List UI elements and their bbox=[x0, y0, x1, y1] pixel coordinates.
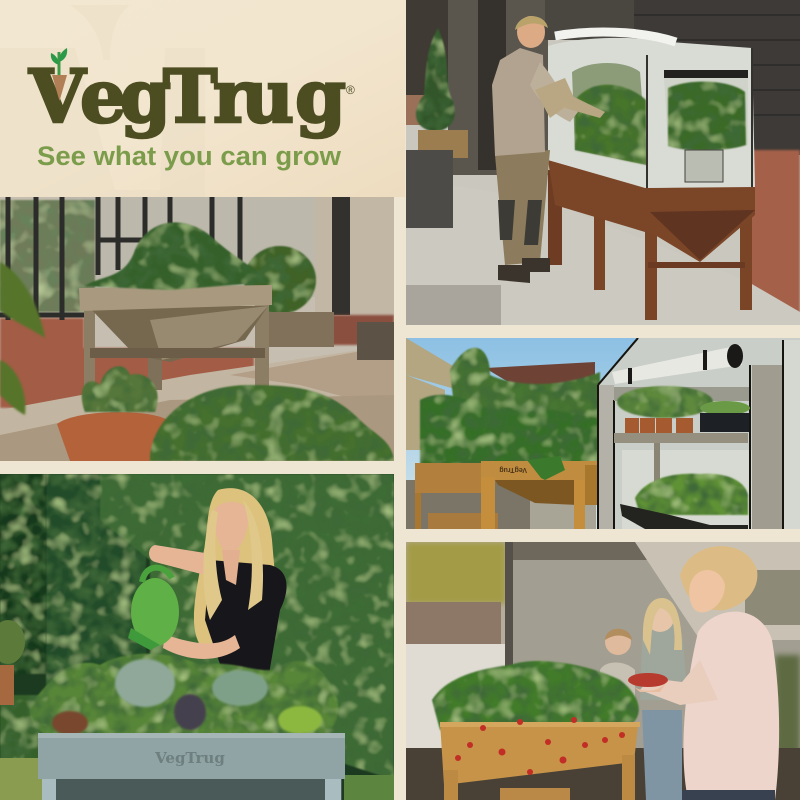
left shrub bbox=[0, 474, 394, 800]
building wall and doors bbox=[406, 0, 800, 175]
rolled cover bbox=[612, 344, 743, 384]
paving bbox=[406, 185, 800, 325]
topiary tree and pot bbox=[416, 28, 468, 158]
logo wordmark: VegTrug bbox=[28, 54, 346, 140]
green leaf hanging bbox=[527, 456, 565, 480]
planter foliage bbox=[85, 222, 270, 290]
photo: family picking strawberries bbox=[406, 542, 800, 800]
blue-green cabbage leaves bbox=[52, 659, 322, 735]
green watering can bbox=[128, 568, 179, 650]
leafy tree background bbox=[100, 474, 394, 780]
planter bbox=[79, 285, 272, 400]
paving under planters bbox=[406, 480, 596, 529]
grey planter with label: VegTrug bbox=[154, 749, 225, 767]
photo: woman watering a grey planter bbox=[0, 474, 394, 800]
man watering bbox=[492, 16, 578, 283]
wooden planter rear bbox=[415, 463, 498, 529]
blurred leaf at left edge bbox=[0, 262, 45, 415]
planter vegetables bbox=[30, 654, 338, 737]
decking bbox=[406, 748, 800, 800]
panel: logo on pale wood bbox=[0, 5, 405, 197]
lush vegetable foliage bbox=[420, 395, 600, 480]
background shrubs and trellis bbox=[0, 197, 316, 320]
dark cube seat bbox=[406, 150, 453, 228]
logo icon: sprout and soil bbox=[51, 48, 67, 101]
glass doors bbox=[505, 542, 800, 755]
registered mark: ® bbox=[346, 83, 355, 97]
woman holding strawberries bbox=[628, 546, 779, 800]
raised beds at right bbox=[268, 312, 394, 360]
brick wall bbox=[0, 315, 394, 408]
wooden planter front: VegTrug bbox=[499, 466, 527, 473]
ground paving and gravel bbox=[0, 345, 394, 461]
plastic cloche bbox=[548, 32, 755, 188]
photo: planter on patio with brick wall bbox=[0, 197, 394, 461]
wooden planter front bbox=[481, 461, 597, 529]
strawberries bbox=[455, 717, 625, 775]
brick wall bbox=[750, 150, 800, 315]
watering can bbox=[535, 78, 605, 118]
photo: man watering plants under a cloche bbox=[406, 0, 800, 325]
strawberry foliage bbox=[432, 661, 639, 745]
seedling trays lower shelf bbox=[620, 474, 748, 529]
wooden planter bbox=[440, 722, 640, 800]
children in background bbox=[600, 598, 688, 800]
garage building at left bbox=[406, 338, 490, 450]
tagline: See what you can grow bbox=[37, 141, 342, 171]
wooden shelf bbox=[614, 433, 748, 483]
roof of neighbouring house bbox=[485, 362, 595, 392]
brown planter on legs bbox=[548, 160, 755, 320]
dark hedge bbox=[46, 474, 146, 704]
grey planter with label bbox=[38, 733, 345, 800]
greenhouse frame bbox=[598, 338, 800, 529]
ornamental grass and wall bbox=[406, 542, 506, 749]
tree backgrounds bbox=[450, 348, 600, 460]
woman bbox=[149, 488, 287, 680]
blurred foreground foliage bbox=[150, 385, 394, 461]
photo: wooden planters and greenhouse shelves bbox=[406, 338, 800, 529]
seedlings on top shelf bbox=[617, 386, 750, 433]
terracotta pot with plant bbox=[57, 366, 168, 461]
